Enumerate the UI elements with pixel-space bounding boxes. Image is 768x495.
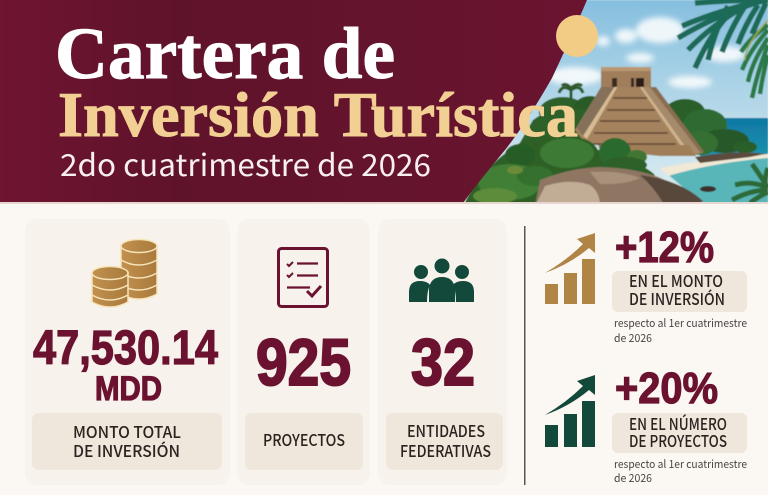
value: 925 xyxy=(256,325,351,399)
note xyxy=(614,315,747,346)
label: FEDERATIVAS xyxy=(400,438,491,462)
note: respecto al 1er cuatrimestre xyxy=(614,315,747,331)
panel: entidades xyxy=(378,219,507,485)
label: DE PROYECTOS xyxy=(629,428,727,452)
stat: +20% xyxy=(545,364,747,486)
label xyxy=(32,413,222,470)
stat: +12% xyxy=(545,223,747,346)
header maroon band xyxy=(0,0,587,203)
value: +20% xyxy=(615,364,718,413)
label: EN EL NÚMERO xyxy=(629,411,727,435)
label: DE INVERSIÓN xyxy=(629,286,725,310)
panel: monto total xyxy=(25,219,230,485)
header bottom edge xyxy=(0,202,768,204)
label xyxy=(245,413,363,470)
value: 32 xyxy=(411,325,475,399)
label xyxy=(612,411,747,453)
note xyxy=(614,456,747,486)
label: ENTIDADES xyxy=(407,418,485,442)
vertical divider xyxy=(524,226,526,485)
panel: proyectos xyxy=(237,219,370,485)
icon: checklist xyxy=(278,248,328,306)
sun circle xyxy=(556,15,598,57)
header scene: pyramid and beach xyxy=(440,0,768,206)
label xyxy=(386,413,503,470)
unit: MDD xyxy=(95,370,162,408)
label: PROYECTOS xyxy=(263,427,345,451)
note: de 2026 xyxy=(614,330,652,346)
title: Inversión Turística xyxy=(58,79,578,150)
note: respecto al 1er cuatrimestre xyxy=(614,456,747,472)
title: Cartera de xyxy=(55,13,395,94)
subtitle: 2do cuatrimestre de 2026 xyxy=(60,141,431,185)
icon: rising chart green xyxy=(545,375,595,447)
label: MONTO TOTAL xyxy=(73,419,181,443)
label: DE INVERSIÓN xyxy=(73,438,180,462)
note: de 2026 xyxy=(614,470,652,486)
label xyxy=(612,268,747,312)
icon: people xyxy=(409,258,474,302)
icon: rising chart gold xyxy=(545,233,595,304)
value: +12% xyxy=(615,223,714,272)
icon: coins xyxy=(92,240,157,307)
title xyxy=(55,13,578,150)
value: 47,530.14 xyxy=(33,322,218,375)
label: EN EL MONTO xyxy=(629,268,723,292)
